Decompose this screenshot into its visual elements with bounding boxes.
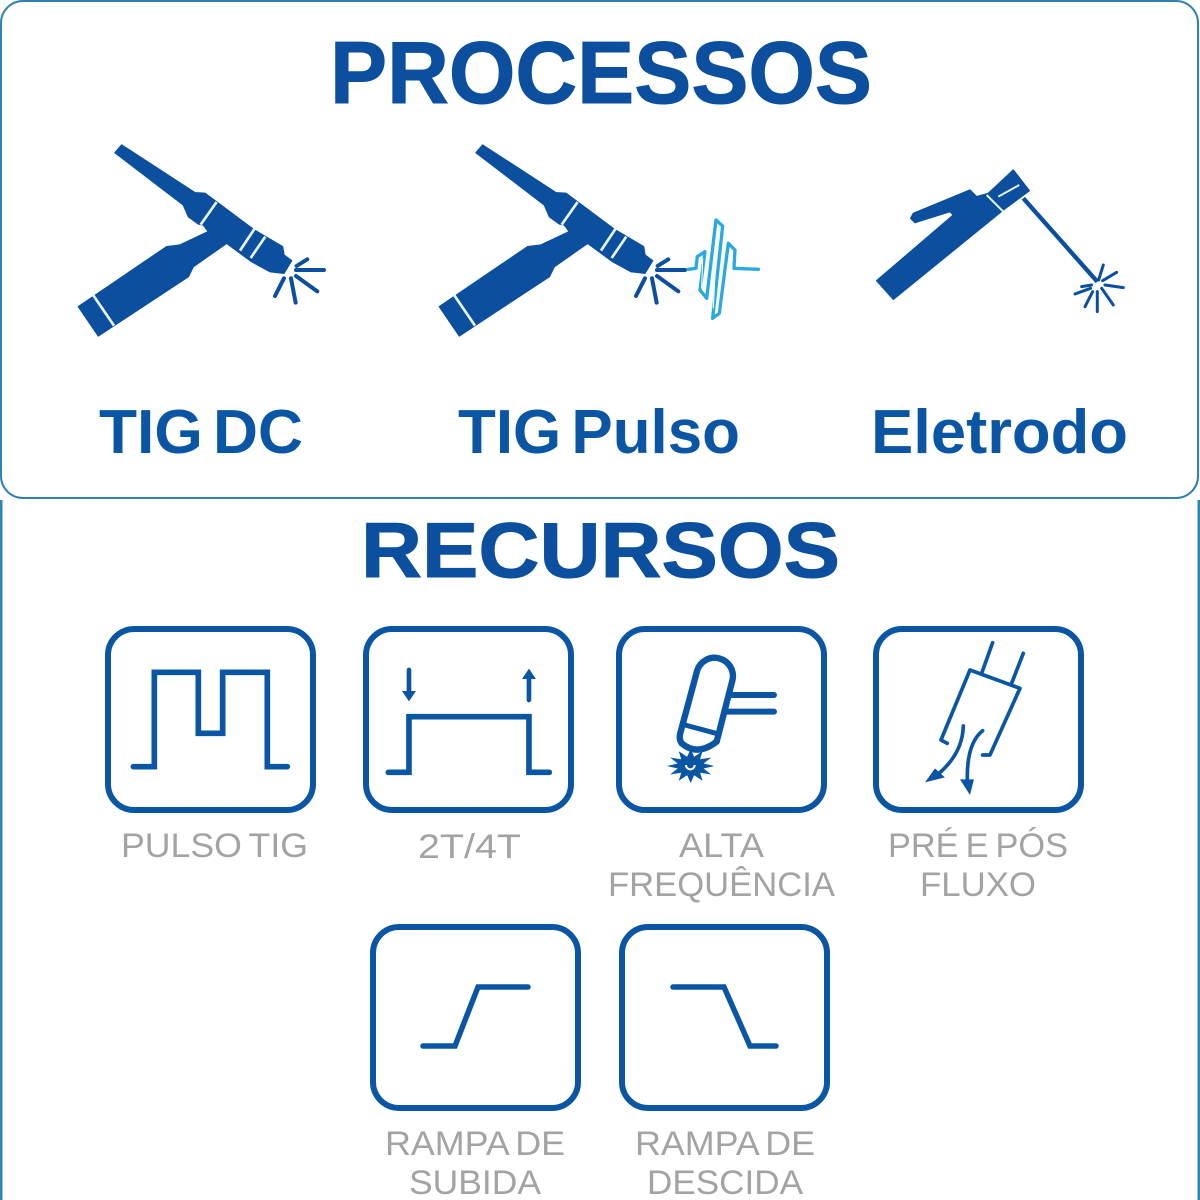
label: alta frequencia: FREQUÊNCIA (608, 866, 835, 904)
label: Eletrodo: Eletrodo (871, 398, 1128, 467)
label: alta frequencia: ALTA (679, 827, 764, 865)
feature: 2T/4T (366, 629, 571, 866)
icon: pulse wave (688, 220, 758, 318)
feature: alta frequencia (608, 629, 835, 904)
icon: TIG DC torch (78, 145, 324, 336)
feature: rampa de descida (622, 927, 827, 1200)
label: rampa de subida: RAMPA DE (385, 1125, 565, 1163)
feature: pulso tig (108, 629, 313, 865)
label: 2T/4T: 2T/4T (418, 828, 521, 866)
feature: pre e pos fluxo (876, 629, 1081, 904)
label: TIG DC: TIG DC (99, 398, 303, 467)
title: RECURSOS: RECURSOS (361, 506, 840, 594)
label: pre e pos fluxo: FLUXO (920, 866, 1036, 904)
feature: rampa de subida (373, 927, 578, 1200)
icon: TIG Pulso torch (439, 145, 685, 336)
panel: processos (1, 1, 1198, 498)
label: pre e pos fluxo: PRÉ E PÓS (888, 827, 1068, 865)
title: PROCESSOS: PROCESSOS (330, 23, 872, 122)
icon: eletrodo holder (877, 170, 1123, 312)
label: rampa de descida: RAMPA DE (635, 1125, 815, 1163)
label: pulso tig: PULSO TIG (121, 827, 308, 865)
label: TIG Pulso: TIG Pulso (458, 398, 740, 467)
